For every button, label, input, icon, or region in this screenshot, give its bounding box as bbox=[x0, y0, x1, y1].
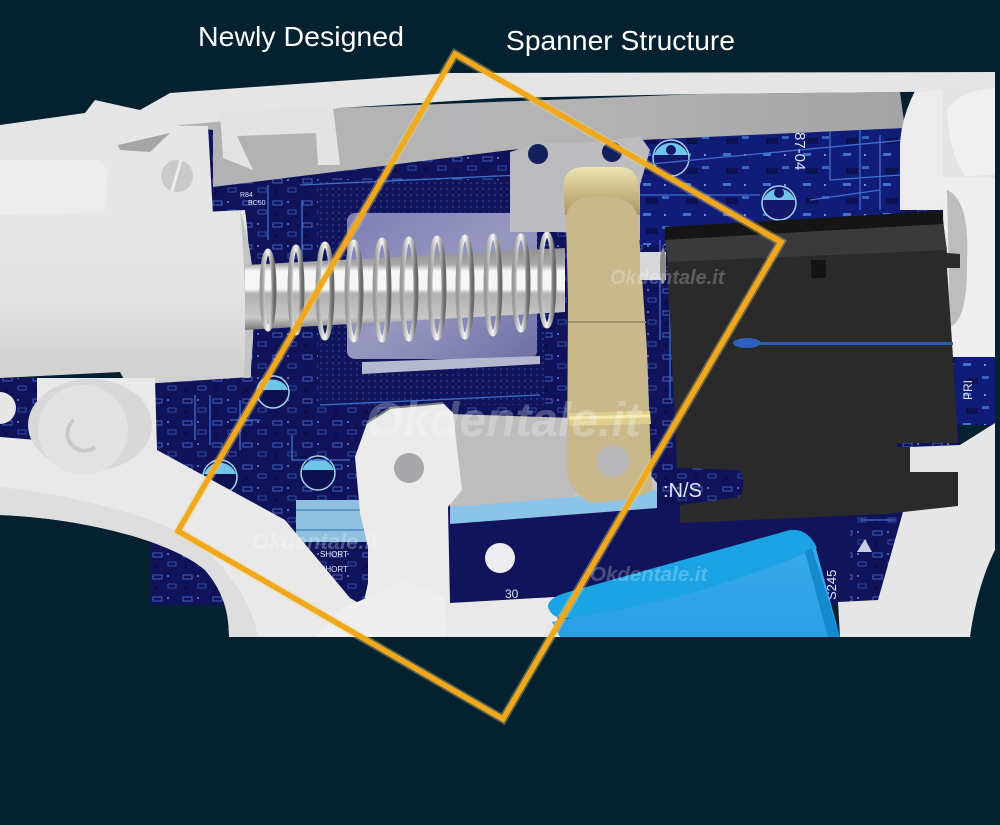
panel: left body under the rail bbox=[0, 125, 213, 262]
PCB labels bbox=[240, 132, 975, 601]
heading right: Spanner Structure bbox=[506, 25, 735, 56]
icon: gold spanner bbox=[563, 167, 652, 503]
panel: white tube handle bbox=[0, 210, 251, 385]
PCB labels: BC50 bbox=[248, 200, 266, 207]
panel: white frame lower left bbox=[0, 378, 560, 637]
panel: grey inner wall bbox=[170, 92, 905, 187]
icon: spring and shaft bbox=[245, 234, 565, 340]
watermark text: Okdentale.it bbox=[366, 394, 643, 447]
panel: metal plate behind lever bbox=[450, 414, 657, 524]
icon: clip on the wall bbox=[220, 107, 340, 170]
PCB capacitors bbox=[203, 140, 796, 494]
orange highlight frame bbox=[178, 54, 781, 719]
watermark text: Okdentale.it bbox=[590, 563, 709, 586]
PCB light blue pad bbox=[296, 500, 368, 542]
PCB labels: SHORT bbox=[320, 550, 348, 559]
PCB labels: SHORT bbox=[320, 565, 348, 574]
icon: black solenoid block bbox=[665, 211, 960, 523]
tube end ring bbox=[240, 210, 254, 378]
PCB traces bbox=[195, 130, 905, 520]
icon: blue tip bbox=[548, 530, 840, 637]
panel: white lower right housing bbox=[838, 423, 995, 637]
panel: PCB background bbox=[0, 125, 995, 605]
small shaft end bbox=[640, 248, 666, 284]
panel: chip bbox=[347, 213, 540, 374]
panel: right-hand bosses bbox=[900, 88, 995, 357]
panel: grey bracket behind spanner bbox=[510, 136, 650, 240]
heading left: Newly Designed bbox=[198, 21, 404, 52]
panel: top rail of housing bbox=[0, 72, 995, 170]
icon: boss bbox=[28, 379, 152, 475]
PCB labels: PRI bbox=[961, 380, 975, 400]
watermark text: Okdentale.it bbox=[252, 529, 380, 554]
PCB labels: S245 bbox=[824, 570, 839, 600]
PCB white holes bbox=[485, 543, 515, 573]
PCB labels: 87-04 bbox=[791, 132, 808, 170]
icon: white lever bbox=[315, 403, 462, 637]
watermark text: Okdentale.it bbox=[610, 267, 726, 289]
PCB labels: :N/S bbox=[663, 480, 702, 502]
PCB labels: R84 bbox=[240, 192, 253, 199]
icon: slotted screw bbox=[161, 160, 193, 192]
watermark text bbox=[252, 267, 726, 586]
PCB labels: 30 bbox=[505, 587, 519, 601]
